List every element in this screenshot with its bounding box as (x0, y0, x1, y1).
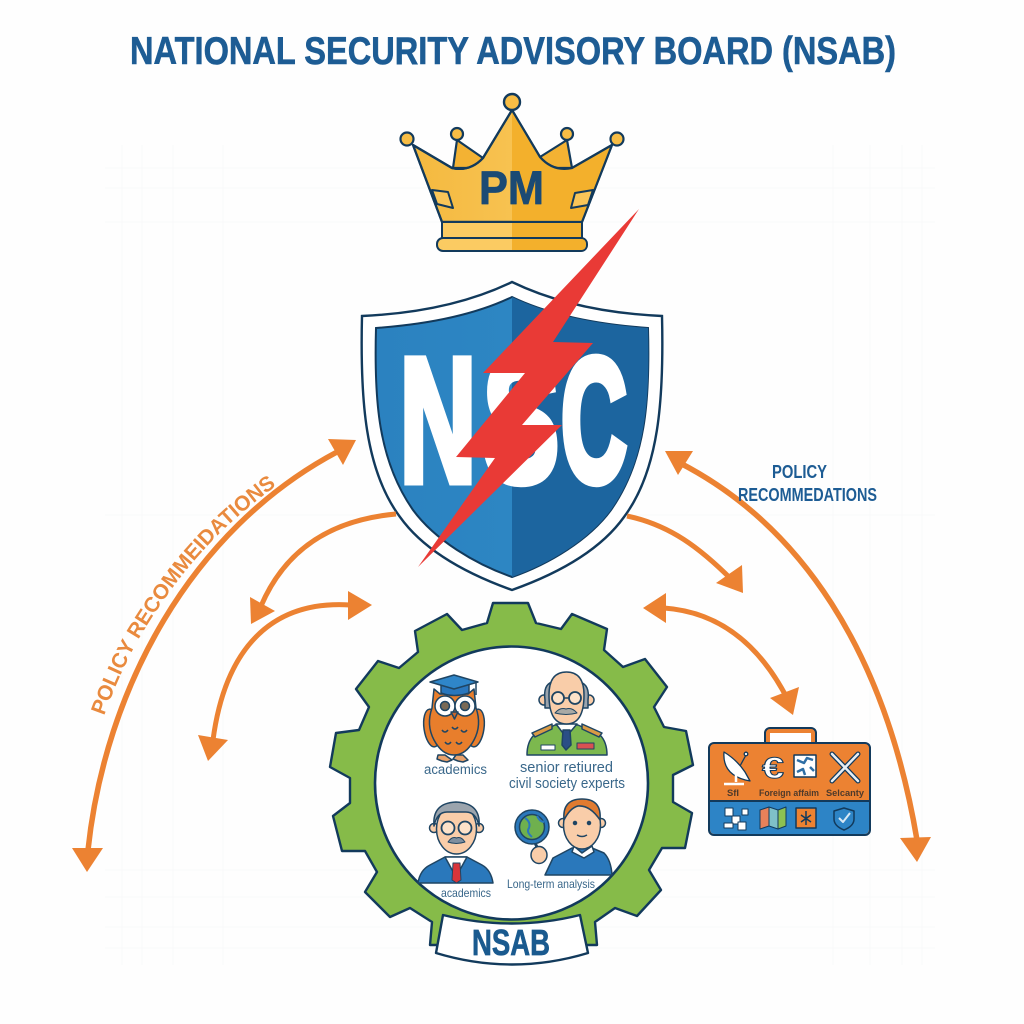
briefcase labels: Selcanty (826, 788, 864, 798)
label: senior retired civil society experts: civil society experts (509, 775, 625, 792)
shield letters: NSC (400, 323, 627, 519)
arrow: NSC to left upper (250, 514, 396, 624)
briefcase labels: Foreign affaim (759, 788, 819, 798)
briefcase icon: check shield (834, 808, 854, 830)
figure: analyst with magnifying glass (515, 799, 612, 875)
briefcase icon: orange tile (796, 808, 816, 828)
briefcase labels: SfI (727, 788, 739, 798)
icon: NSC shield (362, 282, 662, 590)
arrow: long right policy recommendations (665, 451, 931, 862)
title: NATIONAL SECURITY ADVISORY BOARD (NSAB) (130, 30, 896, 73)
banner: NSAB: NSAB (472, 922, 550, 963)
icon: policy briefcase (709, 728, 870, 835)
crown label: PM: PM (479, 161, 544, 214)
icon: PM crown (400, 94, 624, 251)
arrow: long left policy recommendations (72, 439, 356, 872)
gear: NSAB advisory board (330, 603, 693, 964)
briefcase icon: satellite dish (724, 752, 750, 784)
label: right policy recommendations: POLICY (772, 462, 827, 482)
label: senior retired civil society experts: senior retiured (520, 759, 613, 776)
briefcase labels (727, 788, 864, 798)
briefcase icon: folded map (760, 807, 786, 829)
briefcase icon: euro sign: € (762, 752, 784, 785)
label: curved policy recommendations: POLICY RECOMMEIDATIONS (91, 476, 274, 714)
arrow: NSAB to briefcase (643, 593, 799, 715)
arrow: NSAB to left lower (198, 591, 372, 761)
label: academics (suit): academics (441, 886, 491, 900)
shield letters: NSC: N (400, 323, 476, 519)
icon: red lightning bolt (418, 209, 639, 567)
banner: NSAB (436, 915, 588, 964)
briefcase icon: crossed swords (832, 754, 858, 781)
briefcase icon: network nodes (724, 808, 748, 830)
label: right policy recommendations (738, 462, 877, 505)
figure: academic in suit (418, 802, 493, 883)
label: academics (owl): academics (424, 762, 487, 777)
figure: owl with mortarboard (421, 675, 487, 762)
shield letters: NSC: C (561, 323, 627, 519)
figure: retired military officer (527, 672, 607, 755)
label: long-term analysis: Long-term analysis (507, 877, 595, 891)
briefcase icon: map tile (794, 755, 816, 777)
label: right policy recommendations: RECOMMEDATIONS (738, 485, 877, 505)
shield letters: NSC: S (483, 323, 559, 519)
arrow: NSC to right upper (627, 516, 743, 593)
gear inner circle (375, 646, 648, 920)
label: senior retired civil society experts (509, 759, 625, 792)
